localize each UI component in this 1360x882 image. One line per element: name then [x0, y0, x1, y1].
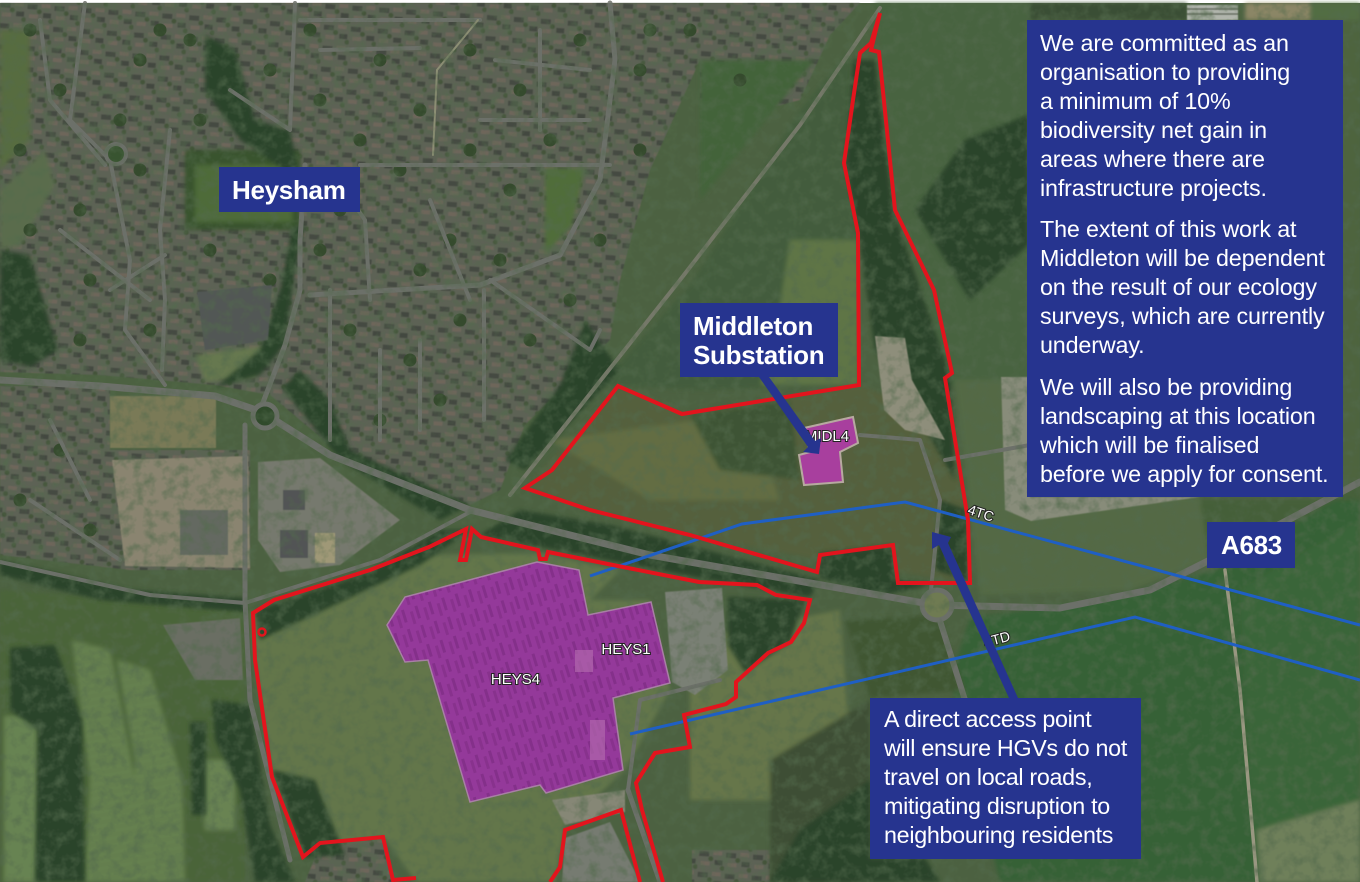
panel: direct access callout: will ensure HGVs do not	[884, 735, 1127, 761]
label: Heysham: Heysham	[232, 175, 346, 205]
tree belts	[0, 35, 1028, 882]
text: landscaping: landscaping at this location	[1040, 403, 1316, 429]
text: net gain: infrastructure projects.	[1040, 175, 1267, 201]
label: MIDL4: MIDL4	[805, 428, 849, 445]
text: net gain: areas where there are	[1040, 146, 1265, 172]
red boundary: south Heysham	[253, 529, 810, 882]
text: net gain	[1040, 30, 1290, 201]
text: landscaping: We will also be providing	[1040, 374, 1292, 400]
red boundary: north Middleton	[525, 13, 970, 583]
label: Middleton Substation	[680, 303, 838, 377]
label: Middleton Substation: Middleton	[693, 311, 813, 341]
text: net gain: We are committed as an	[1040, 30, 1289, 56]
label: A683: A683	[1221, 530, 1282, 560]
panel: direct access callout: A direct access point	[884, 706, 1091, 732]
panel: direct access callout: mitigating disruption to	[884, 793, 1110, 819]
panel: direct access callout: neighbouring residents	[884, 822, 1113, 848]
arrow: Middleton label to substation	[759, 377, 821, 454]
scattered garden trees	[20, 30, 740, 530]
label: A683	[1207, 522, 1295, 568]
label: Heysham	[219, 167, 360, 212]
text: net gain: biodiversity net gain in	[1040, 117, 1267, 143]
circuit label: 4TC: 4TC	[966, 501, 996, 525]
text: ecology surveys: The extent of this work at	[1040, 216, 1296, 242]
label: HEYS4: HEYS4	[491, 671, 540, 688]
text: ecology surveys: Middleton will be dependent	[1040, 245, 1325, 271]
arrow: access point callout to road	[932, 532, 1018, 698]
text: ecology surveys: surveys, which are currently	[1040, 303, 1325, 329]
text: ecology surveys: underway.	[1040, 332, 1144, 358]
label: HEYS1: HEYS1	[601, 641, 651, 658]
text: net gain: organisation to providing	[1040, 59, 1290, 85]
site parcel: MIDL4	[799, 417, 858, 485]
panel: direct access callout: travel on local roads,	[884, 764, 1092, 790]
panel: direct access callout	[870, 698, 1141, 859]
light ground patches	[110, 5, 1238, 825]
label: Middleton Substation: Substation	[693, 340, 824, 370]
residential areas	[0, 3, 860, 882]
site parcel: HEYS4 and HEYS1	[387, 562, 670, 802]
text: landscaping: which will be finalised	[1040, 432, 1259, 458]
circuit label: 4TD: 4TD	[982, 628, 1012, 650]
text: landscaping	[1040, 374, 1328, 487]
text: net gain: a minimum of 10%	[1040, 88, 1231, 114]
small red marker	[258, 628, 266, 636]
text: landscaping: before we apply for consent.	[1040, 461, 1328, 487]
text: ecology surveys	[1040, 216, 1325, 358]
text: ecology surveys: on the result of our ecology	[1040, 274, 1317, 300]
panel: biodiversity commitment	[1027, 20, 1343, 497]
blue overhead lines	[590, 502, 1360, 734]
